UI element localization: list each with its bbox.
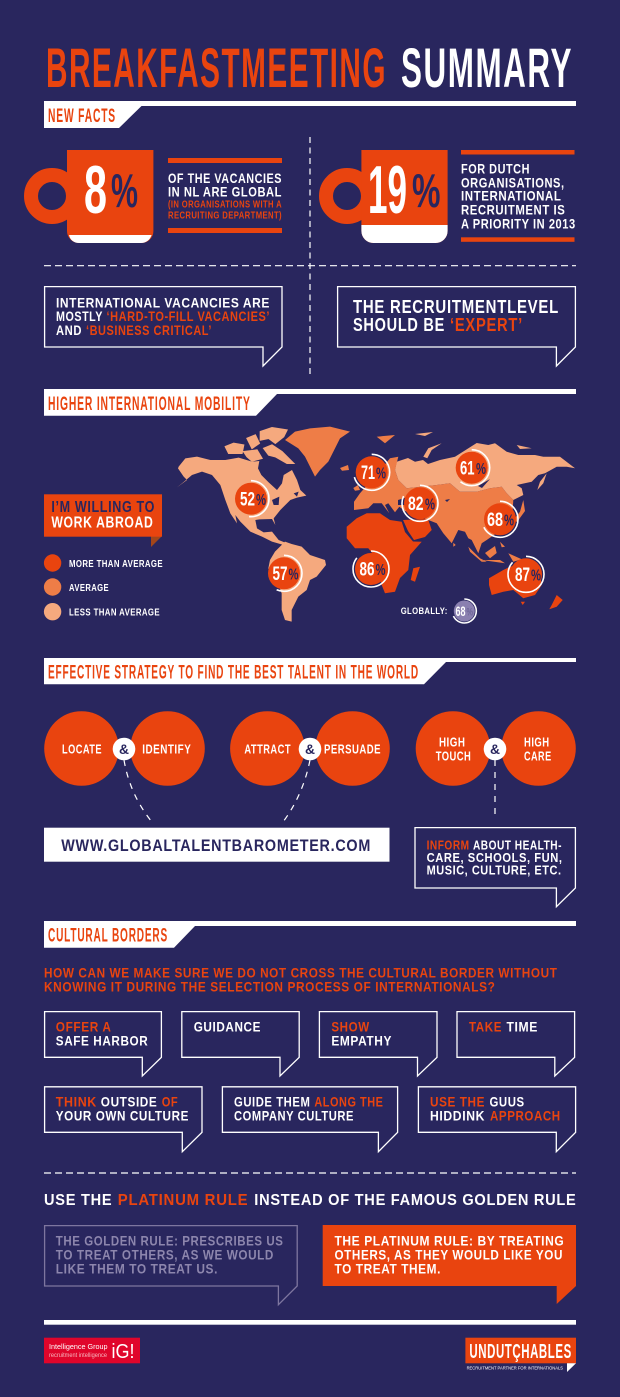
venn pair: high touch and high care xyxy=(416,711,576,786)
callout: platinum rule: TO TREAT THEM. xyxy=(334,1260,441,1276)
callout: offer a safe harbor xyxy=(45,1012,161,1076)
marker: oceania 87 percent: % xyxy=(531,568,541,584)
venn pair: high touch and high care: TOUCH xyxy=(436,750,471,764)
label: willing to work abroad: WORK ABROAD xyxy=(51,515,153,532)
marker: asia 68 percent: % xyxy=(504,512,514,530)
marker: oceania 87 percent: 87 xyxy=(515,565,530,586)
marker: africa 86 percent: % xyxy=(376,562,386,579)
panel: 8 percent mug xyxy=(31,150,153,243)
venn pair: attract and persuade: PERSUADE xyxy=(324,742,381,756)
heading: cultural borders: CULTURAL BORDERS xyxy=(48,926,168,947)
marker: north america 52 percent: 52 xyxy=(240,490,255,510)
venn pair: locate and identify xyxy=(44,711,205,786)
venn pair: high touch and high care: CARE xyxy=(524,750,552,764)
callout: platinum rule: OTHERS, AS THEY WOULD LIKE YOU xyxy=(334,1247,563,1263)
callout: recruitment level: SHOULD BE xyxy=(353,315,445,335)
logo: undutchables xyxy=(465,1338,576,1372)
text block: vacancies: OF THE VACANCIES xyxy=(168,170,282,186)
callout: think outside of your own culture: THINK xyxy=(56,1094,97,1110)
heading: new facts: NEW FACTS xyxy=(48,106,116,127)
text block: dutch organisations: INTERNATIONAL xyxy=(461,188,562,204)
dashed connector: locate to website xyxy=(124,760,152,822)
question text: KNOWING IT DURING THE SELECTION PROCESS OF INTERNATIONALS? xyxy=(44,978,496,994)
callout: guide them along the company culture xyxy=(222,1087,398,1152)
callout: guidance: GUIDANCE xyxy=(194,1019,261,1035)
callout: think outside of your own culture: YOUR OWN CULTURE xyxy=(56,1108,189,1124)
legend: LESS THAN AVERAGE xyxy=(69,608,160,618)
callout: offer a safe harbor: SAFE HARBOR xyxy=(56,1032,148,1048)
icon: mug handle xyxy=(326,175,368,217)
logo: intelligence group: iG! xyxy=(112,1341,134,1363)
label: willing to work abroad xyxy=(44,494,162,547)
marker: globally 68 percent: % xyxy=(466,606,473,618)
map: europe and asia xyxy=(354,457,513,553)
panel: 19 percent mug xyxy=(326,150,448,243)
marker: russia 61 percent: 61 xyxy=(460,458,475,480)
text block: vacancies: RECRUITING DEPARTMENT) xyxy=(168,210,282,222)
venn pair: attract and persuade: & xyxy=(305,741,315,757)
marker: north america 52 percent xyxy=(233,481,269,517)
callout: guide them along the company culture: COMPANY CULTURE xyxy=(234,1108,354,1124)
callout: inform xyxy=(415,828,575,907)
question text xyxy=(44,964,558,994)
marker: south america 57 percent: 57 xyxy=(272,564,288,585)
logo: undutchables: RECRUITMENT PARTNER FOR INTERNATIONALS xyxy=(467,1365,563,1370)
legend: MORE THAN AVERAGE xyxy=(69,559,163,570)
website banner: WWW.GLOBALTALENTBAROMETER.COM xyxy=(61,836,371,855)
callout: think outside of your own culture: OUTSIDE xyxy=(101,1094,157,1110)
text block: dutch organisations: RECRUITMENT IS xyxy=(461,201,565,217)
marker: europe 71 percent xyxy=(354,454,390,490)
callout: use the guus hiddink approach: USE THE xyxy=(430,1094,485,1110)
text block: dutch organisations: A PRIORITY IN 2013 xyxy=(461,215,576,231)
callout: guide them along the company culture: GUIDE THEM xyxy=(234,1094,310,1110)
callout: international vacancies: ‘HARD-TO-FILL VACANCIES’ xyxy=(106,308,270,324)
platinum rule headline: USE THE xyxy=(44,1192,112,1209)
heading: higher international mobility: HIGHER INTERNATIONAL MOBILITY xyxy=(48,394,251,415)
platinum rule headline: PLATINUM RULE xyxy=(118,1192,248,1209)
marker: europe 71 percent: 71 xyxy=(361,463,375,484)
marker: south america 57 percent xyxy=(266,555,302,591)
venn pair: locate and identify: IDENTIFY xyxy=(142,742,191,756)
callout: use the guus hiddink approach: HIDDINK xyxy=(430,1108,485,1124)
dashed connector: attract to website xyxy=(283,760,310,822)
callout: inform: INFORM xyxy=(427,837,470,852)
marker: russia 61 percent: % xyxy=(476,461,486,478)
callout: guide them along the company culture: ALONG THE xyxy=(314,1094,384,1110)
callout: use the guus hiddink approach xyxy=(418,1087,576,1152)
callout: take time: TIME xyxy=(506,1019,538,1035)
callout: international vacancies xyxy=(45,287,282,366)
platinum rule headline: INSTEAD OF THE FAMOUS GOLDEN RULE xyxy=(254,1192,577,1209)
marker: asia 68 percent: 68 xyxy=(487,510,503,531)
world map xyxy=(177,427,575,623)
callout: golden rule xyxy=(45,1226,297,1305)
text block: dutch organisations xyxy=(461,150,576,242)
marker: europe 71 percent: % xyxy=(376,466,386,482)
map: south america and greenland xyxy=(268,427,350,622)
marker: globally 68 percent: GLOBALLY: xyxy=(401,606,448,617)
map: north america xyxy=(177,428,306,545)
callout: international vacancies: MOSTLY xyxy=(56,308,103,324)
statistic: 19 percent: % xyxy=(412,164,440,217)
callout: use the guus hiddink approach: APPROACH xyxy=(490,1108,561,1124)
text block: dutch organisations: ORGANISATIONS, xyxy=(461,174,565,190)
callout: international vacancies: ‘BUSINESS CRITICAL’ xyxy=(86,322,212,338)
callout: platinum rule xyxy=(323,1225,576,1304)
marker: globally 68 percent: 68 xyxy=(456,603,466,619)
marker: north america 52 percent: % xyxy=(256,492,266,509)
callout: inform: ABOUT HEALTH- xyxy=(473,837,562,852)
marker: oceania 87 percent xyxy=(508,556,544,592)
statistic: 8 percent: % xyxy=(111,164,138,217)
venn pair: attract and persuade: ATTRACT xyxy=(244,742,291,756)
callout: recruitment level: ‘EXPERT’ xyxy=(450,315,523,335)
callout: inform: MUSIC, CULTURE, ETC. xyxy=(427,863,562,878)
platinum rule headline xyxy=(44,1192,576,1209)
venn pair: locate and identify: & xyxy=(119,741,129,757)
website banner xyxy=(44,828,390,862)
callout: golden rule: LIKE THEM TO TREAT US. xyxy=(56,1260,218,1276)
venn pair: high touch and high care: HIGH xyxy=(439,736,465,750)
dashed connector: high touch to inform xyxy=(494,760,496,816)
callout: use the guus hiddink approach: GUUS xyxy=(490,1094,525,1110)
callout: show empathy: SHOW xyxy=(331,1019,370,1035)
heading: cultural borders xyxy=(44,921,576,948)
map: russia xyxy=(395,443,575,500)
callout: show empathy: EMPATHY xyxy=(331,1032,392,1048)
marker: middle east 82 percent xyxy=(402,485,438,521)
icon: mug handle xyxy=(31,175,73,217)
statistic: 19 percent: 19 xyxy=(368,152,407,228)
callout: offer a safe harbor: OFFER A xyxy=(56,1019,112,1035)
marker: russia 61 percent xyxy=(454,450,490,486)
callout: take time: TAKE xyxy=(469,1019,502,1035)
marker: south america 57 percent: % xyxy=(288,566,298,584)
marker: middle east 82 percent: % xyxy=(425,496,435,514)
logo: intelligence group: Intelligence Group xyxy=(49,1342,108,1351)
marker: asia 68 percent xyxy=(482,501,518,537)
venn pair: attract and persuade xyxy=(230,711,390,786)
legend: AVERAGE xyxy=(69,583,109,594)
text block: vacancies: IN NL ARE GLOBAL xyxy=(168,184,282,200)
callout: think outside of your own culture: OF xyxy=(162,1094,178,1110)
icon: mug body xyxy=(67,150,153,243)
text block: dutch organisations: FOR DUTCH xyxy=(461,160,530,176)
callout: guidance xyxy=(182,1012,299,1076)
heading: higher international mobility xyxy=(44,389,576,416)
callout: recruitment level xyxy=(338,287,575,366)
callout: golden rule: THE GOLDEN RULE: PRESCRIBES US xyxy=(56,1233,283,1249)
venn pair: high touch and high care: HIGH xyxy=(524,736,550,750)
marker: middle east 82 percent: 82 xyxy=(408,494,424,515)
logo: intelligence group: recruitment intelligence xyxy=(49,1353,108,1359)
venn pair: locate and identify: LOCATE xyxy=(62,742,102,756)
callout: take time xyxy=(457,1012,575,1076)
callout: international vacancies: INTERNATIONAL VACANCIES ARE xyxy=(56,294,270,310)
heading: new facts xyxy=(44,101,576,128)
callout: recruitment level: THE RECRUITMENTLEVEL xyxy=(353,297,559,317)
callout: inform: CARE, SCHOOLS, FUN, xyxy=(427,850,563,865)
label: willing to work abroad: I’M WILLING TO xyxy=(51,499,155,516)
callout: platinum rule: THE PLATINUM RULE: BY TREATING xyxy=(334,1233,564,1249)
logo: intelligence group xyxy=(44,1338,140,1363)
text block: vacancies: (IN ORGANISATIONS WITH A xyxy=(168,198,282,210)
callout: international vacancies: AND xyxy=(56,322,82,338)
callout: show empathy xyxy=(319,1012,437,1076)
statistic: 8 percent: 8 xyxy=(84,152,107,228)
legend xyxy=(44,554,163,620)
venn pair: high touch and high care: & xyxy=(490,741,500,757)
callout: think outside of your own culture xyxy=(45,1087,202,1152)
marker: africa 86 percent: 86 xyxy=(360,560,374,581)
map: africa arabia australia xyxy=(347,513,422,593)
callout: golden rule: TO TREAT OTHERS, AS WE WOULD xyxy=(56,1247,274,1263)
marker: africa 86 percent xyxy=(353,551,389,587)
text block: vacancies xyxy=(168,158,282,233)
marker: globally 68 percent xyxy=(401,599,476,623)
icon: mug body xyxy=(361,150,448,243)
